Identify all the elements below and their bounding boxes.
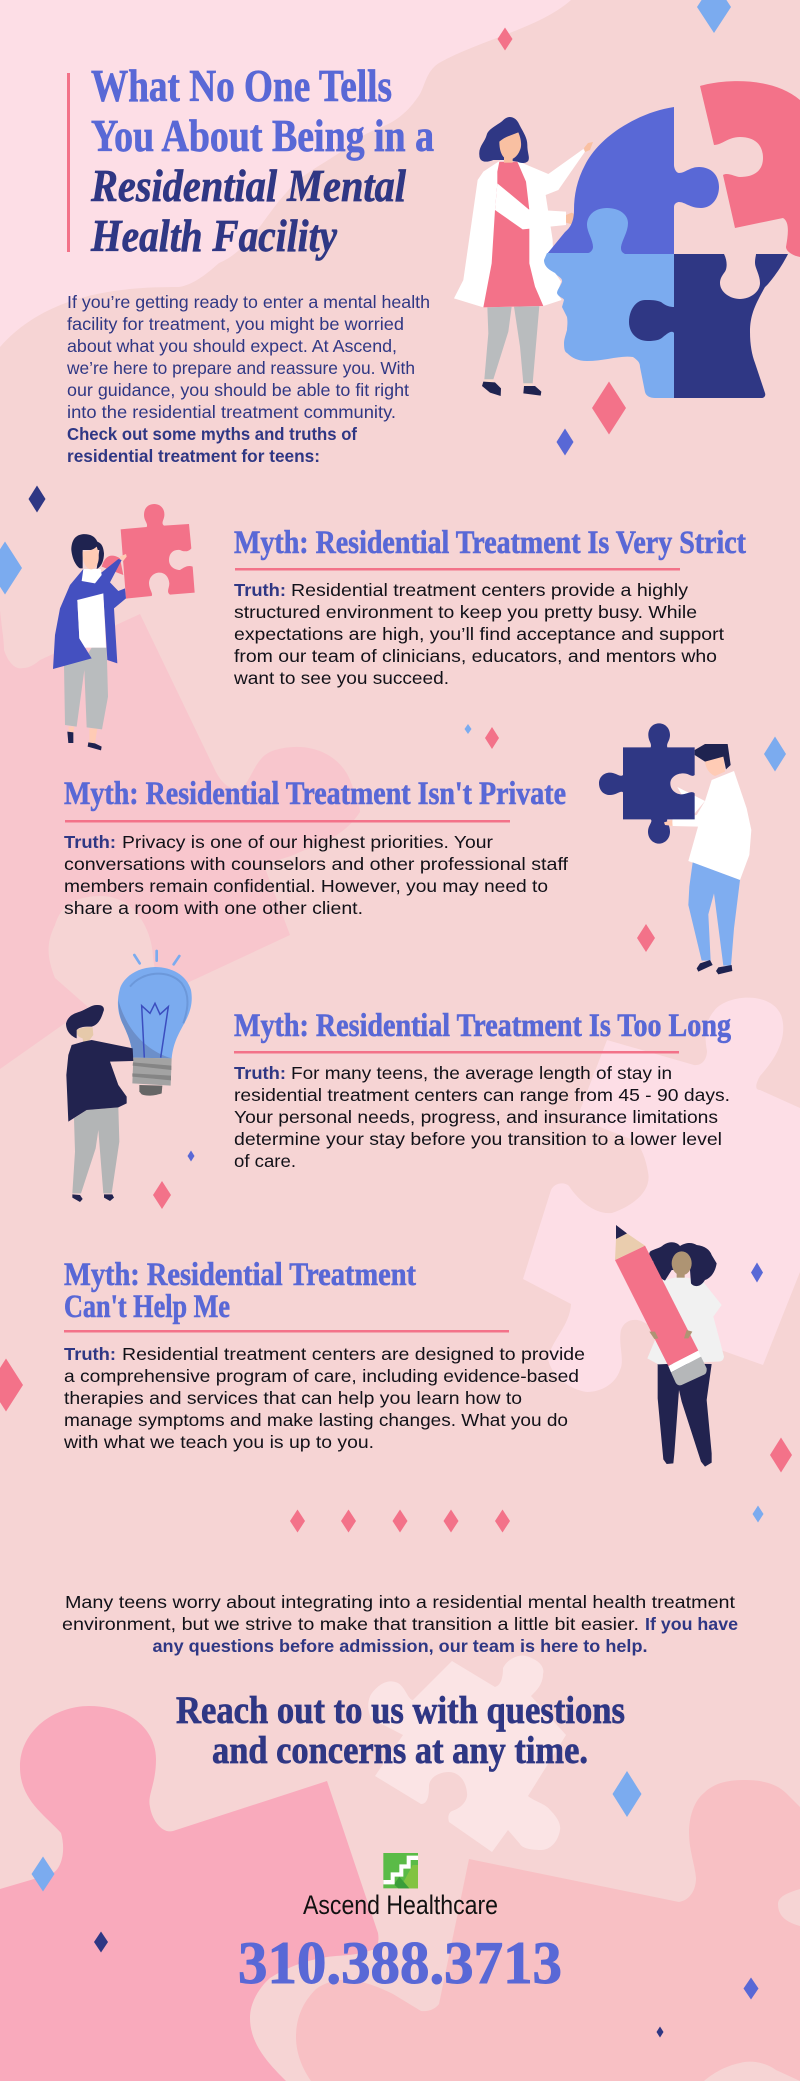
doctor hand on puzzle [584,142,593,152]
myth 3 truth text: of care. [234,1151,296,1171]
myth 4 truth text [63,1344,585,1452]
doctor [454,117,585,396]
intro text: our guidance, you should be able to fit right [67,380,409,400]
myth 1 truth text: from our team of clinicians, educators, and mentors who [234,646,717,666]
myth 3 truth text: Truth: [234,1063,286,1083]
myth 4 truth text: Residential treatment centers are designed to provide [122,1344,585,1364]
myth 4 truth text: with what we teach you is up to you. [63,1432,374,1452]
illustration: man holding navy puzzle piece [599,723,751,974]
myth 4 truth text: Truth: [64,1344,116,1364]
myth 1 truth text: structured environment to keep you pretty busy. While [234,602,697,622]
title: What No One Tells [91,61,392,111]
illustration: doctor with puzzle head [454,81,800,398]
puzzle piece: light blue [544,207,674,398]
accent bar beside title [67,73,70,252]
myth 3 truth text: residential treatment centers can range from 45 - 90 days. [234,1085,730,1105]
puzzle piece: pink [700,81,800,257]
myth 3 truth text [234,1063,730,1171]
call to action heading: Reach out to us with questions [176,1689,625,1732]
phone number: 310.388.3713 [238,1930,562,1996]
myth 1 truth text: expectations are high, you’ll find acceptance and support [234,624,724,644]
puzzle piece: blue [547,107,719,254]
intro text: Check out some myths and truths of [67,424,357,444]
call to action heading: and concerns at any time. [212,1729,588,1772]
call to action heading [176,1689,625,1772]
closing paragraph: Many teens worry about integrating into a residential mental health treatment [65,1592,735,1612]
myth 2 truth text: members remain confidential. However, you may need to [64,876,548,896]
illustration: man holding light bulb [66,951,192,1202]
intro text: into the residential treatment community. [67,402,396,422]
title: Residential Mental [90,161,406,211]
myth 2 heading: Myth: Residential Treatment Isn't Private [64,776,566,812]
logo icon [383,1853,418,1888]
title: Health Facility [90,211,338,261]
closing paragraph: any questions before admission, our team is here to help. [152,1636,648,1656]
illustration: woman holding giant pencil [615,1225,724,1467]
myth 2 truth text: Truth: [64,832,116,852]
title: You About Being in a [91,111,434,161]
myth 1 truth text [233,580,724,688]
closing paragraph: If you have [645,1614,738,1634]
intro text: about what you should expect. At Ascend, [67,336,397,356]
intro text: we’re here to prepare and reassure you. With [66,358,415,378]
intro text: facility for treatment, you might be worried [67,314,404,334]
myth 4 truth text: therapies and services that can help you learn how to [64,1388,522,1408]
myth 4 heading: Can't Help Me [64,1289,230,1325]
myth 1 truth text: Truth: [234,580,286,600]
myth 3 truth text: Your personal needs, progress, and insurance limitations [234,1107,718,1127]
myth 2 truth text: share a room with one other client. [64,898,363,918]
intro text: residential treatment for teens: [67,446,320,466]
closing paragraph [62,1592,738,1656]
myth 4 heading [64,1257,509,1332]
myth 3 truth text: determine your stay before you transition to a lower level [234,1129,722,1149]
intro text: If you’re getting ready to enter a mental health [67,292,430,312]
myth 4 truth text: a comprehensive program of care, including evidence-based [64,1366,579,1386]
myth 2 truth text: conversations with counselors and other professional staff [64,854,568,874]
myth 2 truth text: Privacy is one of our highest priorities. Your [122,832,493,852]
myth 4 heading: Myth: Residential Treatment [64,1257,416,1293]
closing paragraph: environment, but we strive to make that transition a little bit easier. [62,1614,639,1634]
myth 3 truth text: For many teens, the average length of stay in [291,1063,672,1083]
title [90,61,434,261]
illustration: woman holding pink puzzle piece [53,504,195,750]
myth 2 truth text [64,832,568,918]
puzzle piece: navy [629,254,788,398]
myth 1 truth text: want to see you succeed. [233,668,449,688]
logo wordmark: Ascend Healthcare [303,1890,498,1920]
myth 1 truth text: Residential treatment centers provide a highly [291,580,688,600]
myth 4 truth text: manage symptoms and make lasting changes. What you do [64,1410,568,1430]
intro text [66,292,430,466]
